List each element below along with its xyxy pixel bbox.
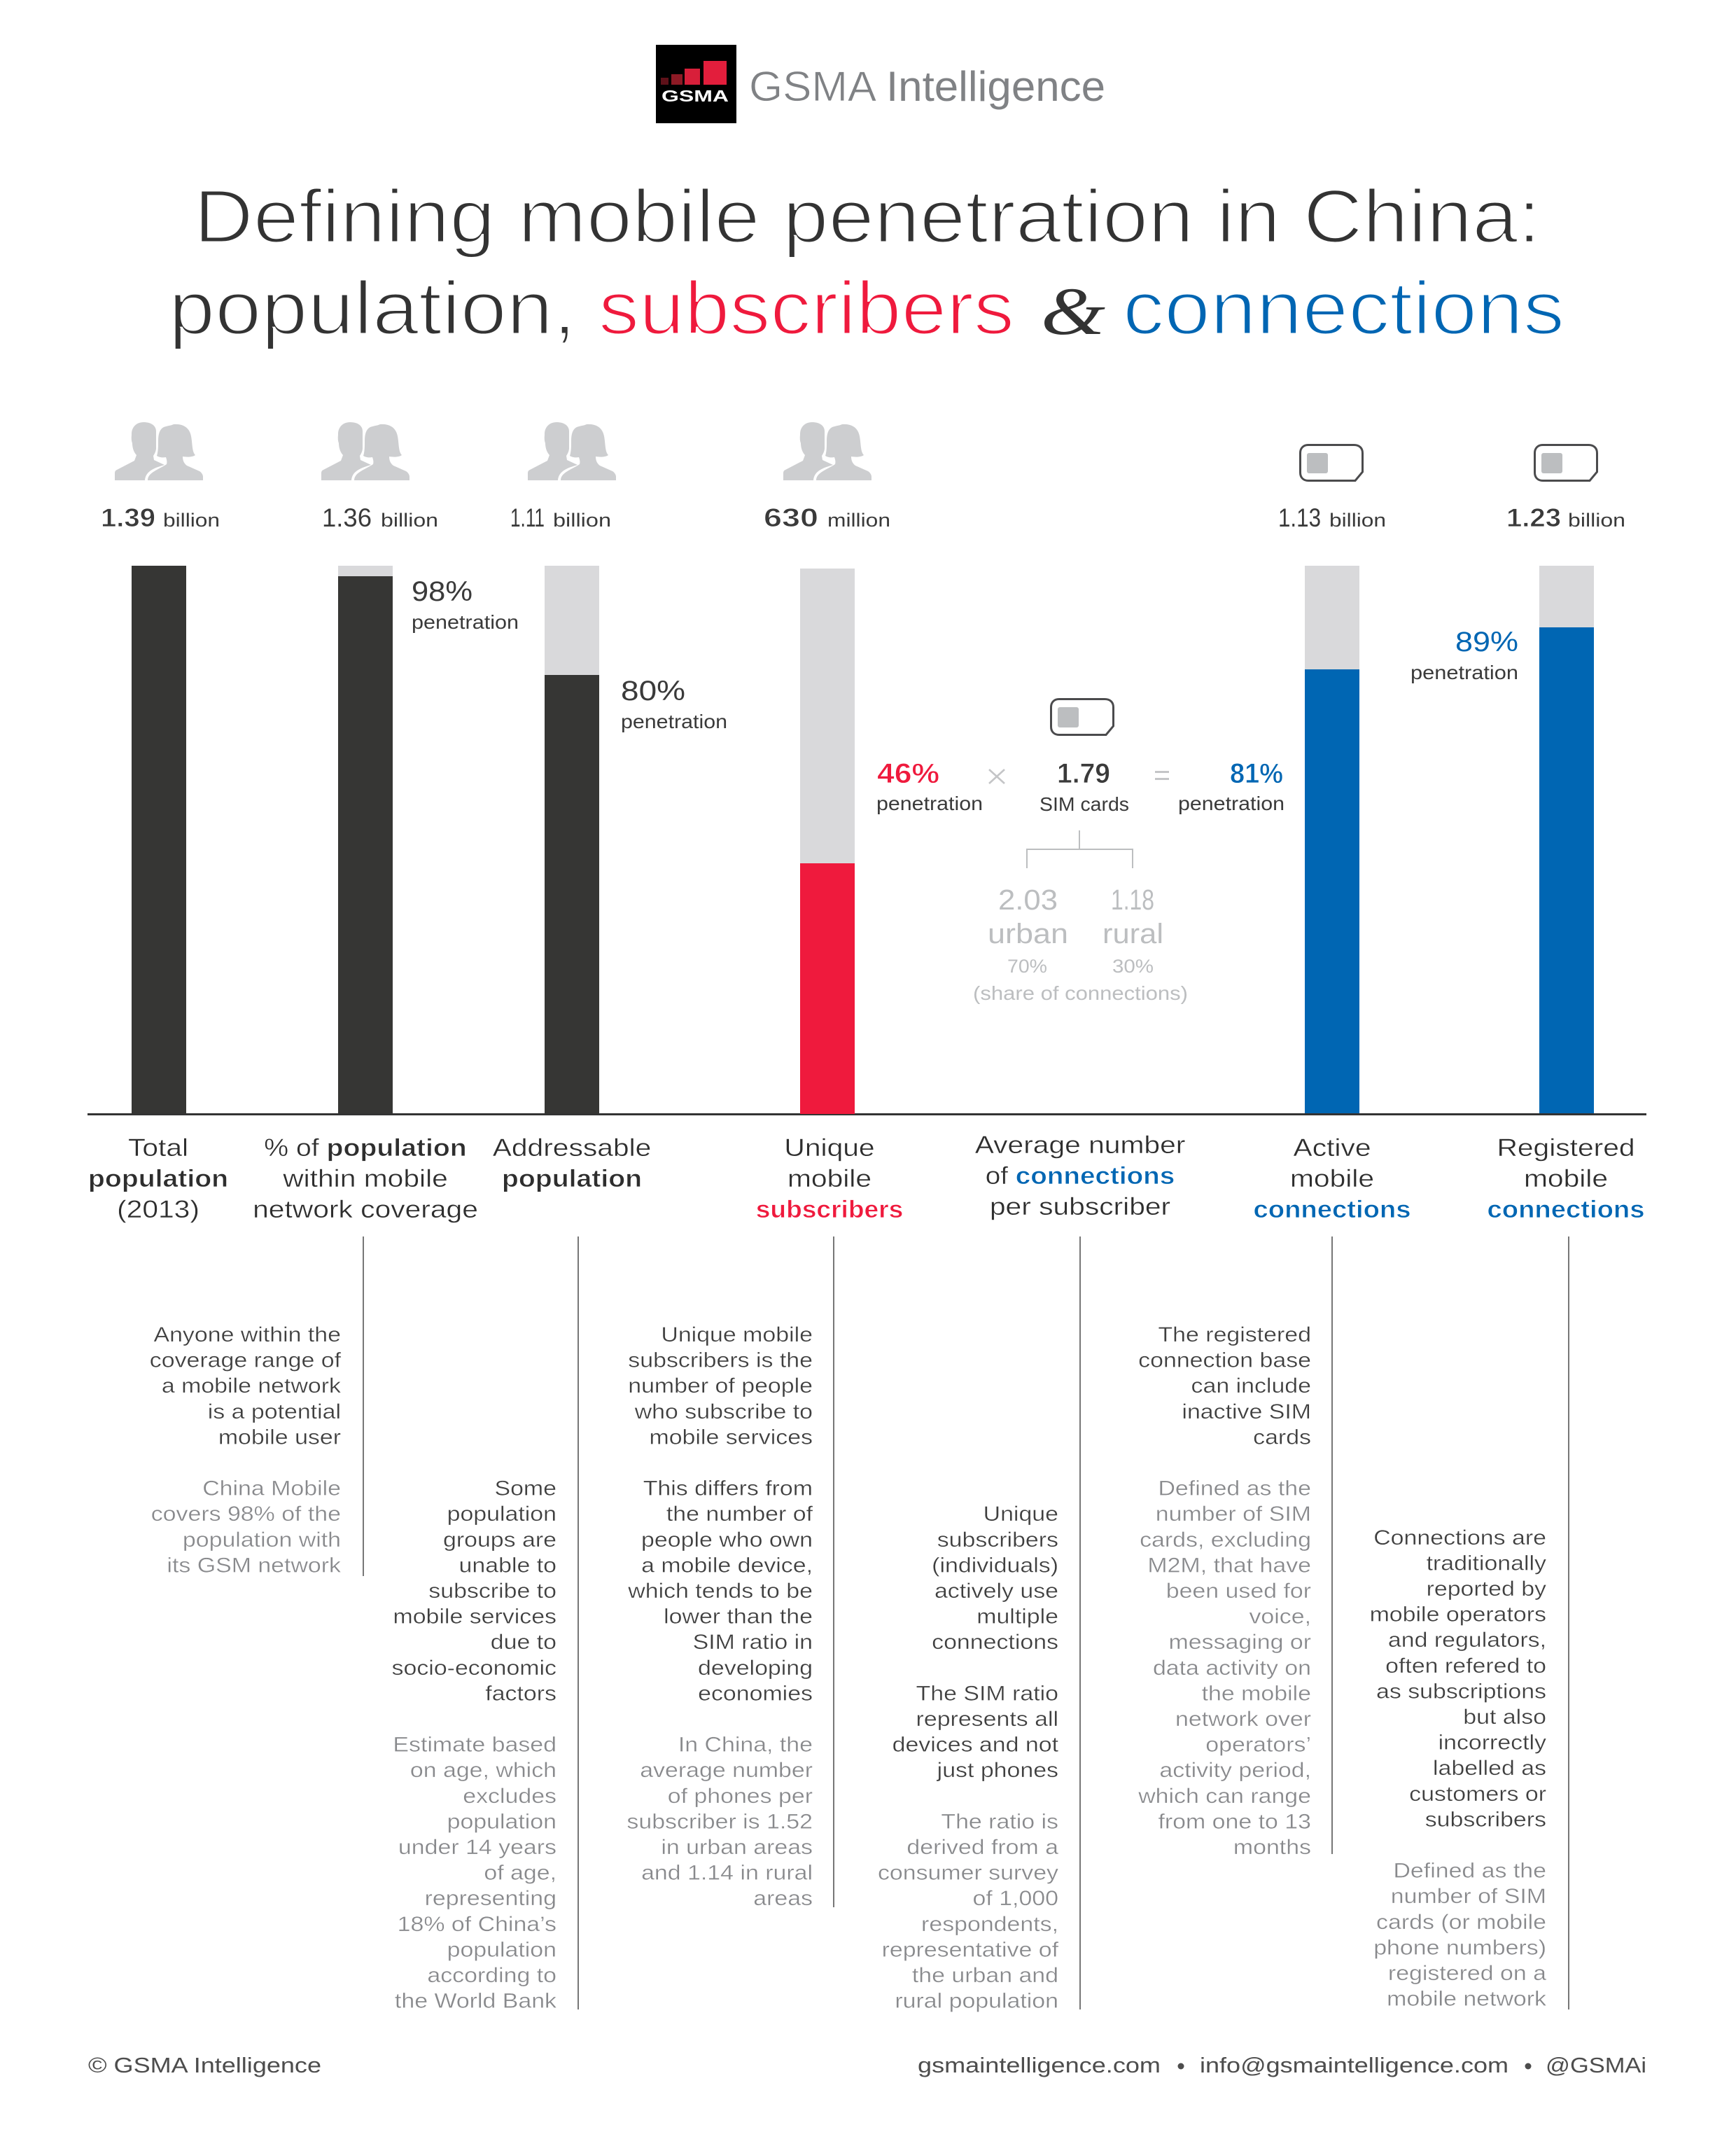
value: 1.13 billion — [1278, 503, 1386, 532]
column label: Active mobile connections — [1254, 1135, 1410, 1223]
text block: total population notes: a mobile network — [162, 1374, 342, 1398]
value: 630 million: 630 — [764, 503, 818, 532]
text block: SIM ratio notes: The SIM ratio — [916, 1681, 1058, 1705]
text block: SIM ratio notes: the urban and — [912, 1963, 1058, 1987]
text block: active connections notes: data activity on — [1153, 1656, 1311, 1679]
text block: total population notes — [150, 1323, 342, 1577]
text block: unique subscribers notes: economies — [698, 1681, 813, 1705]
footer: contact details: gsmaintelligence.com — [918, 2053, 1161, 2077]
text block: SIM ratio notes: representative of — [882, 1937, 1058, 1961]
value: 1.11 billion: 1.11 — [510, 503, 545, 532]
text block: unique subscribers notes: of phones per — [668, 1784, 813, 1807]
bar: registered connections — [1539, 566, 1594, 1113]
text block: unique subscribers notes — [626, 1323, 813, 1910]
equals sign — [1155, 771, 1169, 780]
column label: Total population: (2013) — [117, 1197, 200, 1223]
text block: registered connections notes: as subscriptions — [1376, 1679, 1546, 1703]
bar chart — [88, 566, 1646, 1115]
text block: registered connections notes: Defined as the — [1393, 1858, 1546, 1882]
text block: SIM ratio notes: (individuals) — [932, 1553, 1058, 1577]
text block: addressable population notes: subscribe to — [428, 1579, 556, 1603]
value: 1.11 billion: billion — [553, 510, 611, 531]
times sign — [989, 769, 1004, 783]
text block: total population notes: population with — [183, 1528, 341, 1551]
column label: Active mobile connections: Active — [1294, 1135, 1371, 1162]
value: 1.11 billion — [510, 503, 611, 532]
text block: total population notes: coverage range of — [150, 1348, 341, 1372]
callout: 89% penetration — [1410, 627, 1518, 683]
text block: registered connections notes: mobile network — [1387, 1986, 1547, 2010]
text block: registered connections notes: but also — [1463, 1705, 1546, 1729]
text block: unique subscribers notes: the number of — [666, 1502, 813, 1526]
text block: active connections notes: M2M, that have — [1147, 1553, 1311, 1577]
text block: SIM ratio notes: multiple — [976, 1604, 1058, 1628]
text block: addressable population notes: Some — [494, 1476, 556, 1500]
text block: registered connections notes: labelled as — [1433, 1756, 1546, 1780]
formula panel: penetration x SIM cards = connections penetration — [876, 699, 1284, 1004]
value: 1.23 billion: billion — [1568, 510, 1625, 531]
text block: addressable population notes: unable to — [459, 1553, 556, 1577]
text block: addressable population notes: factors — [485, 1681, 556, 1705]
text block: addressable population notes: population — [447, 1502, 556, 1526]
value: 1.13 billion: 1.13 — [1278, 503, 1321, 532]
text block: unique subscribers notes: people who own — [641, 1528, 813, 1551]
text block: addressable population notes: population — [447, 1809, 556, 1833]
column label: Active mobile connections: connections — [1254, 1195, 1410, 1223]
text block: unique subscribers notes: In China, the — [678, 1732, 813, 1756]
46% penetration: 46% — [877, 758, 939, 789]
icon: SIM card — [1051, 699, 1113, 735]
title: & — [1041, 274, 1105, 349]
value: 630 million — [764, 503, 890, 532]
title: connections — [1123, 265, 1564, 350]
text block: active connections notes: cards — [1253, 1425, 1311, 1449]
text block: unique subscribers notes: Unique mobile — [661, 1323, 813, 1346]
value: 1.39 billion: 1.39 — [101, 503, 155, 532]
text block: unique subscribers notes: lower than the — [664, 1604, 813, 1628]
text block: unique subscribers notes: who subscribe to — [634, 1400, 813, 1423]
logo mark: GSMA — [662, 87, 729, 105]
text block: SIM ratio notes: rural population — [895, 1988, 1058, 2012]
column label: % of population within mobile network coverage: within mobile — [282, 1166, 448, 1192]
column label: Total population — [88, 1135, 228, 1223]
text block: addressable population notes — [392, 1476, 557, 2012]
text block: addressable population notes: groups are — [443, 1528, 556, 1551]
column label: % of population within mobile network coverage — [253, 1134, 478, 1223]
bar: total population — [132, 566, 186, 1113]
value: 1.39 billion: billion — [163, 510, 220, 531]
text block: registered connections notes: often refered to — [1385, 1654, 1546, 1677]
value: 1.36 billion: billion — [381, 510, 438, 531]
value: 630 million: million — [827, 510, 890, 531]
text block: SIM ratio notes: connections — [932, 1630, 1058, 1654]
text block: unique subscribers notes: average number — [640, 1758, 813, 1782]
text block: addressable population notes: representing — [425, 1886, 556, 1910]
text block: total population notes: its GSM network — [167, 1553, 342, 1577]
callout: 98% penetration: 98% — [412, 576, 472, 607]
text block: addressable population notes: on age, which — [410, 1758, 556, 1782]
text block: registered connections notes: and regulators, — [1388, 1628, 1546, 1652]
bar: population coverage — [338, 566, 393, 1113]
icon: people, subscribers — [783, 422, 872, 480]
text block: registered connections notes — [1370, 1526, 1547, 2010]
text block: active connections notes — [1138, 1323, 1311, 1859]
text block: unique subscribers notes: subscriber is 1.52 — [626, 1809, 813, 1833]
text block: active connections notes: operators’ — [1205, 1732, 1311, 1756]
text block: active connections notes: connection base — [1138, 1348, 1311, 1372]
text block: total population notes: mobile user — [218, 1425, 341, 1449]
text block: SIM ratio notes: represents all — [916, 1707, 1058, 1731]
text block: unique subscribers notes: mobile services — [649, 1425, 813, 1449]
81% penetration: 81% — [1230, 758, 1283, 789]
text block: SIM ratio notes: just phones — [937, 1758, 1058, 1782]
urban and rural breakdown: 2.03 — [998, 884, 1058, 916]
callout: 80% penetration — [621, 676, 727, 732]
text block: addressable population notes: excludes — [463, 1784, 556, 1807]
text block: registered connections notes: Connections are — [1373, 1526, 1546, 1549]
text block: active connections notes: cards, excluding — [1140, 1528, 1311, 1551]
text block: addressable population notes: according to — [427, 1963, 556, 1987]
column label: Registered mobile connections: Registered — [1497, 1135, 1635, 1162]
footer: contact details — [918, 2053, 1646, 2077]
46% penetration — [876, 758, 983, 814]
column label: Average number of connections per subscriber: Average number — [975, 1132, 1186, 1159]
text block: total population notes: covers 98% of the — [151, 1502, 341, 1526]
text block: SIM ratio notes: of 1,000 — [973, 1886, 1058, 1910]
text block: unique subscribers notes: developing — [698, 1656, 813, 1679]
text block: active connections notes: activity period, — [1159, 1758, 1311, 1782]
column label: Registered mobile connections: mobile — [1524, 1166, 1608, 1192]
text block: active connections notes: Defined as the — [1158, 1476, 1311, 1500]
bar: addressable population — [545, 566, 599, 1113]
text block: addressable population notes: under 14 years — [398, 1835, 556, 1859]
text block: addressable population notes: mobile services — [393, 1604, 556, 1628]
text block: SIM ratio notes: devices and not — [892, 1732, 1058, 1756]
value: 1.23 billion — [1506, 503, 1625, 532]
column label: Unique mobile subscribers: mobile — [788, 1166, 872, 1192]
text block: total population notes: Anyone within the — [153, 1323, 341, 1346]
icon: SIM card, active connections — [1301, 445, 1362, 480]
bar: unique subscribers — [800, 569, 855, 1114]
text block: registered connections notes: subscribers — [1425, 1807, 1546, 1831]
footer: copyright: © GSMA Intelligence — [88, 2053, 321, 2077]
value: 1.23 billion: 1.23 — [1506, 503, 1561, 532]
column label: % of population within mobile network coverage: network coverage — [253, 1197, 478, 1223]
icon: people, coverage — [321, 422, 410, 480]
text block: SIM ratio notes: consumer survey — [878, 1860, 1058, 1884]
text block: SIM ratio notes — [878, 1502, 1058, 2012]
text block: SIM ratio notes: Unique — [983, 1502, 1058, 1526]
column label: Addressable population: population — [502, 1164, 642, 1192]
text block: registered connections notes: number of SIM — [1391, 1884, 1546, 1908]
text block: addressable population notes: socio-economic — [392, 1656, 556, 1679]
1.79 SIM cards — [1040, 758, 1129, 815]
icon: SIM card, registered connections — [1534, 445, 1597, 480]
text block: unique subscribers notes: number of people — [628, 1374, 813, 1398]
column label: Registered mobile connections: connections — [1488, 1195, 1644, 1223]
callout: 98% penetration: penetration — [412, 611, 519, 633]
text block: addressable population notes: Estimate based — [393, 1732, 556, 1756]
text block: unique subscribers notes: in urban areas — [661, 1835, 813, 1859]
text block: SIM ratio notes: subscribers — [937, 1528, 1058, 1551]
text block: registered connections notes: phone numbers) — [1373, 1935, 1546, 1959]
text block: addressable population notes: due to — [491, 1630, 556, 1654]
column label: Average number of connections per subscriber: per subscriber — [990, 1194, 1171, 1220]
text block: registered connections notes: reported by — [1427, 1577, 1546, 1601]
title: subscribers — [598, 265, 1014, 350]
text block: total population notes: China Mobile — [202, 1476, 341, 1500]
callout: 89% penetration: 89% — [1455, 627, 1518, 657]
logo mark — [656, 45, 736, 123]
1.79 SIM cards: SIM cards — [1040, 793, 1129, 815]
icon: people, total population — [115, 422, 203, 480]
column label: Average number of connections per subscriber: of connections — [986, 1162, 1175, 1190]
text block: active connections notes: the mobile — [1202, 1681, 1311, 1705]
text block: addressable population notes: population — [447, 1937, 556, 1961]
value: 1.36 billion — [322, 503, 438, 532]
text block: SIM ratio notes: derived from a — [906, 1835, 1058, 1859]
text block: SIM ratio notes: actively use — [934, 1579, 1058, 1603]
1.79 SIM cards: 1.79 — [1057, 758, 1110, 789]
callout: 89% penetration: penetration — [1410, 662, 1518, 683]
text block: registered connections notes: customers or — [1409, 1782, 1546, 1805]
value: 1.36 billion: 1.36 — [322, 503, 372, 532]
text block: active connections notes: can include — [1191, 1374, 1311, 1398]
text block: registered connections notes: cards (or mobile — [1376, 1910, 1546, 1933]
urban and rural breakdown: 30% — [1112, 956, 1154, 977]
81% penetration — [1178, 758, 1284, 814]
text block: unique subscribers notes: and 1.14 in rural — [641, 1860, 813, 1884]
text block: unique subscribers notes: a mobile device, — [641, 1553, 813, 1577]
column label: Addressable population: Addressable — [493, 1135, 651, 1162]
column label: Total population: Total — [128, 1135, 188, 1162]
column label: Unique mobile subscribers: Unique — [784, 1135, 875, 1162]
bracket connector — [1027, 830, 1133, 868]
text block: addressable population notes: the World Bank — [395, 1988, 557, 2012]
81% penetration: penetration — [1178, 793, 1284, 814]
logo: GSMA Intelligence — [656, 45, 1105, 123]
text block: active connections notes: inactive SIM — [1182, 1400, 1311, 1423]
bar: active connections — [1305, 566, 1359, 1113]
text block: registered connections notes: mobile operators — [1370, 1602, 1546, 1626]
text block: active connections notes: which can range — [1138, 1784, 1311, 1807]
text block: registered connections notes: incorrectly — [1438, 1730, 1546, 1754]
footer: contact details: @GSMAi — [1546, 2053, 1646, 2077]
text block: unique subscribers notes: SIM ratio in — [693, 1630, 813, 1654]
callout: 98% penetration — [412, 576, 519, 633]
urban and rural breakdown: 1.18 — [1111, 884, 1154, 916]
logo wordmark: GSMA Intelligence — [749, 63, 1105, 110]
callout: 80% penetration: penetration — [621, 711, 727, 732]
column label: Unique mobile subscribers — [756, 1135, 903, 1223]
text block: active connections notes: The registered — [1158, 1323, 1311, 1346]
urban and rural breakdown — [973, 884, 1188, 1004]
column label: % of population within mobile network coverage: % of population — [264, 1134, 467, 1162]
icon: people, addressable — [528, 422, 616, 480]
title: Defining mobile penetration in China: — [194, 174, 1541, 258]
text block: unique subscribers notes: areas — [753, 1886, 813, 1910]
urban and rural breakdown: 70% — [1007, 956, 1047, 977]
text block: registered connections notes: traditionally — [1427, 1551, 1546, 1575]
column label: Active mobile connections: mobile — [1290, 1166, 1374, 1192]
title: population, — [169, 265, 576, 350]
text block: active connections notes: from one to 13 — [1158, 1809, 1311, 1833]
text block: unique subscribers notes: which tends to be — [627, 1579, 813, 1603]
text block: active connections notes: been used for — [1166, 1579, 1311, 1603]
column label: Registered mobile connections — [1488, 1135, 1644, 1223]
column label: Addressable population — [493, 1135, 651, 1192]
text block: active connections notes: months — [1233, 1835, 1311, 1859]
column label: Total population: population — [88, 1164, 228, 1192]
value: 1.13 billion: billion — [1329, 510, 1386, 531]
text block: total population notes: is a potential — [208, 1400, 341, 1423]
text block: unique subscribers notes: This differs from — [643, 1476, 813, 1500]
text block: active connections notes: network over — [1175, 1707, 1311, 1731]
urban and rural breakdown: urban — [988, 919, 1068, 949]
column label: Average number of connections per subscriber — [975, 1132, 1186, 1220]
urban and rural breakdown: rural — [1102, 919, 1163, 949]
value: 1.39 billion — [101, 503, 220, 532]
text block: SIM ratio notes: respondents, — [921, 1912, 1058, 1935]
text block: active connections notes: messaging or — [1169, 1630, 1311, 1654]
text block: active connections notes: voice, — [1249, 1604, 1311, 1628]
46% penetration: penetration — [876, 793, 983, 814]
text block: addressable population notes: 18% of China’s — [398, 1912, 556, 1935]
footer: contact details: info@gsmaintelligence.com — [1200, 2053, 1508, 2077]
text block: registered connections notes: registered on a — [1388, 1961, 1546, 1985]
column divider lines — [363, 1236, 1569, 2009]
callout: 80% penetration: 80% — [621, 676, 685, 706]
title — [169, 174, 1564, 350]
column label: Unique mobile subscribers: subscribers — [756, 1195, 903, 1223]
text block: SIM ratio notes: The ratio is — [941, 1809, 1058, 1833]
text block: active connections notes: number of SIM — [1156, 1502, 1311, 1526]
text block: addressable population notes: of age, — [484, 1860, 556, 1884]
urban and rural breakdown: (share of connections) — [973, 982, 1188, 1004]
chart baseline — [88, 1113, 1646, 1115]
text block: unique subscribers notes: subscribers is the — [628, 1348, 813, 1372]
